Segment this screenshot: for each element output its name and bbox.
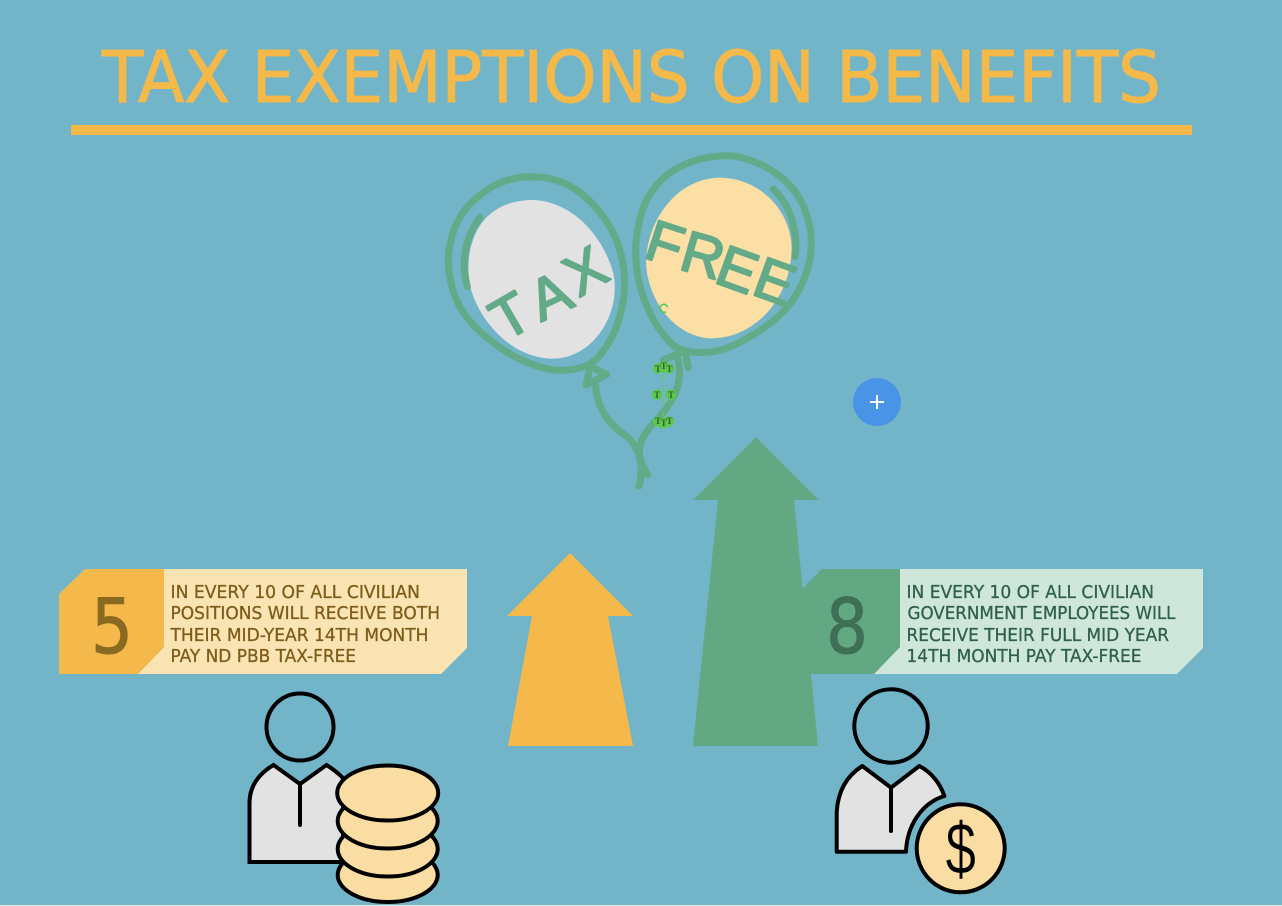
callout: 5 in every 10: 5 [91,582,133,671]
balloon: tax [448,177,641,486]
callout: 8 in every 10: IN EVERY 10 OF ALL CIVILIAN [906,582,1154,603]
callout: 8 in every 10: 8 [826,582,868,671]
editor handles [652,303,676,429]
editor handles: TTTTTTTT [654,361,674,428]
title underline [71,125,1192,135]
icon: coins [337,766,438,902]
illustration: tax free balloons [448,156,811,486]
callout: 5 in every 10 [59,569,467,674]
balloon: free [636,156,811,475]
icon: dollar coin: $ [945,808,976,890]
callout: 8 in every 10: GOVERNMENT EMPLOYEES WILL [908,603,1176,624]
icon: dollar coin [917,804,1005,892]
icon: person with dollar coin [837,689,1005,892]
callout: 8 in every 10: 14TH MONTH PAY TAX-FREE [906,646,1142,667]
add button [853,378,901,426]
callout: 5 in every 10: THEIR MID-YEAR 14TH MONTH [170,625,428,646]
callout: 5 in every 10: PAY ND PBB TAX-FREE [170,646,356,667]
callout: 8 in every 10 [801,569,1203,674]
arrow: green up [693,437,819,746]
title: TAX EXEMPTIONS ON BENEFITS [101,36,1161,119]
callout: 5 in every 10: POSITIONS WILL RECEIVE BOTH [170,603,440,624]
balloon word: FREE: FREE [638,208,804,319]
icon: person with coin stack [250,694,438,902]
callout: 5 in every 10: IN EVERY 10 OF ALL CIVILIAN [170,582,420,603]
callout: 8 in every 10: RECEIVE THEIR FULL MID YEAR [906,625,1169,646]
balloon word: TAX: TAX [479,234,619,353]
arrow: orange up [507,553,633,746]
